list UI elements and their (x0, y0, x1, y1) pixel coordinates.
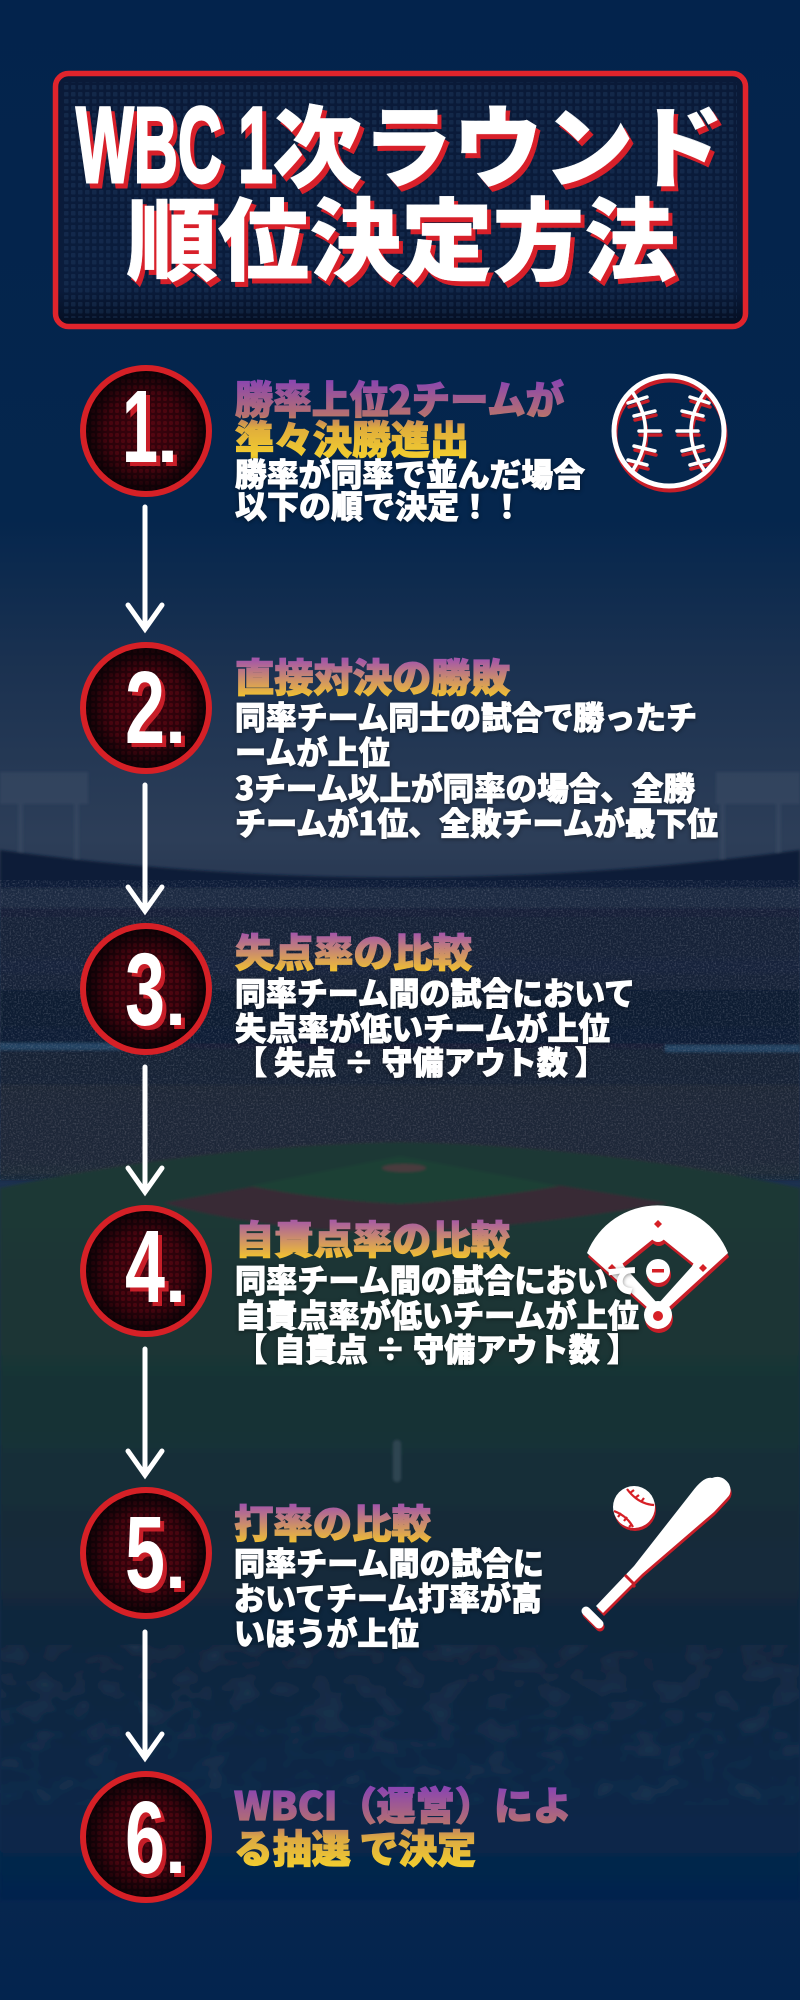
heading 6 (234, 1776, 572, 1875)
description 5 (234, 1539, 544, 1655)
description 1: 勝率が同率で並んだ場合 (235, 450, 585, 496)
icon: baseball diamond (587, 1205, 728, 1329)
description 1: 以下の順で決定！！ (235, 482, 523, 528)
heading 3: 失点率の比較 (235, 923, 472, 979)
description 3: 同率チーム間の試合において (235, 969, 635, 1015)
heading 1 (235, 370, 564, 466)
heading 1: 勝率上位2チームが (235, 370, 564, 426)
description 5: おいてチーム打率が高 (234, 1574, 542, 1620)
description 2 (235, 693, 718, 845)
heading 6: WBCI（運営）によ (234, 1776, 572, 1832)
badge 1 (83, 368, 209, 494)
arrow 1 to 2 (128, 507, 162, 629)
icon: baseball (614, 376, 724, 486)
badge 5: 5 (125, 1495, 165, 1610)
description 1 (235, 450, 585, 528)
title text: WBC (76, 84, 222, 205)
description 2: チームが1位、全敗チームが最下位 (235, 799, 718, 845)
arrow 5 to 6 (128, 1632, 162, 1758)
description 5: いほうが上位 (234, 1609, 419, 1655)
badge 3: 3 (125, 932, 165, 1047)
heading 1: 準々決勝進出 (235, 410, 469, 466)
description 3 (235, 969, 635, 1084)
description 4: 【 自責点 ÷ 守備アウト数 】 (236, 1325, 638, 1371)
description 3: 【 失点 ÷ 守備アウト数 】 (236, 1038, 606, 1084)
description 4 (235, 1256, 639, 1371)
arrow 2 to 3 (128, 785, 162, 911)
badge 6 (83, 1774, 209, 1900)
badge 4 (83, 1208, 209, 1334)
description 5: 同率チーム間の試合に (234, 1539, 544, 1585)
badge 5: . (165, 1520, 186, 1605)
step 1 (83, 368, 724, 528)
title text: 次ラウンド (272, 76, 724, 206)
badge 1: . (157, 394, 178, 479)
arrow 3 to 4 (128, 1067, 162, 1192)
badge 5 (83, 1490, 209, 1616)
badge 4: . (165, 1234, 186, 1319)
title text: 順位決定方法 (126, 169, 676, 299)
arrow 4 to 5 (128, 1349, 162, 1475)
badge 6: . (165, 1805, 186, 1890)
badge 1: 1 (122, 369, 158, 484)
description 4: 自責点率が低いチームが上位 (235, 1291, 639, 1337)
description 4: 同率チーム間の試合において (235, 1256, 638, 1302)
heading 6: る抽選 で決定 (234, 1819, 476, 1875)
heading 5: 打率の比較 (234, 1494, 431, 1550)
step 3 (83, 923, 635, 1084)
badge 3 (83, 926, 209, 1052)
step 4 (83, 1205, 728, 1371)
badge 3: . (165, 957, 186, 1042)
step 6 (83, 1774, 572, 1900)
title text (76, 76, 724, 299)
description 2: 3チーム以上が同率の場合、全勝 (235, 764, 695, 810)
description 2: 同率チーム同士の試合で勝ったチ (235, 693, 697, 739)
badge 4: 4 (125, 1209, 165, 1324)
icon: bat and ball (586, 1477, 731, 1624)
title panel (56, 74, 746, 326)
badge 2: . (165, 675, 186, 760)
title text: 1 (238, 84, 273, 205)
step 2 (83, 645, 718, 845)
badge 2: 2 (125, 650, 165, 765)
step 5 (83, 1477, 731, 1655)
badge 2 (83, 645, 209, 771)
heading 4: 自責点率の比較 (235, 1210, 510, 1266)
description 3: 失点率が低いチームが上位 (235, 1004, 610, 1050)
badge 6: 6 (125, 1780, 165, 1895)
heading 2: 直接対決の勝敗 (235, 648, 510, 704)
description 2: ームが上位 (235, 728, 390, 774)
